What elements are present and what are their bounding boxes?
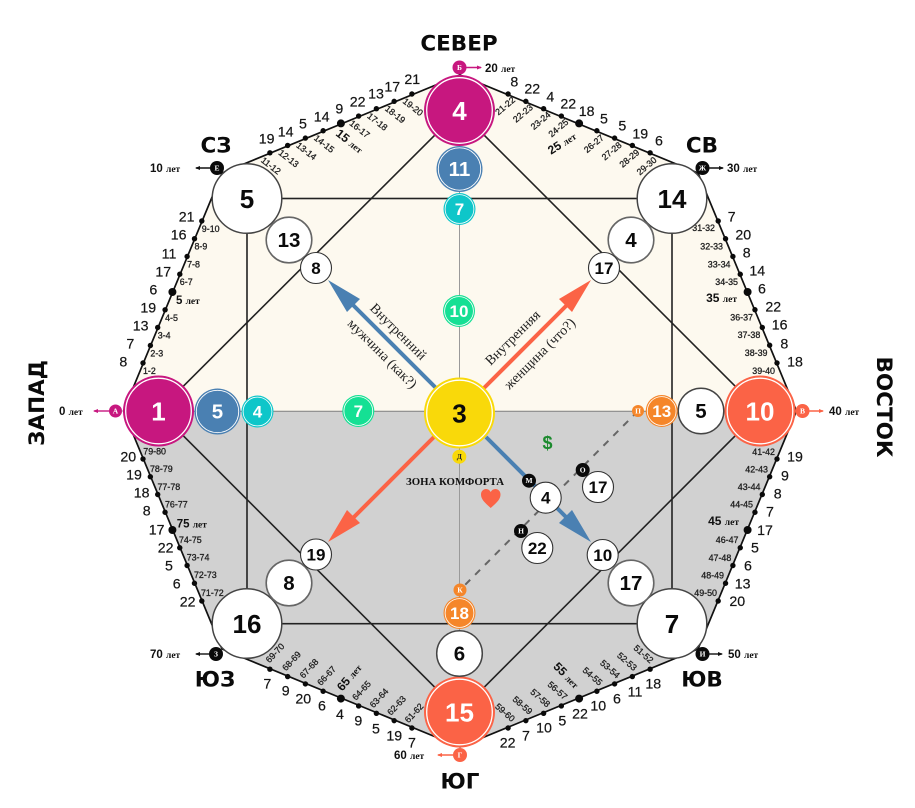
node: 17 with badge О bbox=[576, 463, 614, 502]
edge: north to north-east (ages 20-30): 8 bbox=[510, 75, 518, 91]
node: north-east corner 14: 14 bbox=[658, 184, 687, 214]
edge: south-east to south (ages 50-60): 57-58 bbox=[528, 687, 552, 709]
edge: north-east to east (ages 30-40): 33-34 bbox=[708, 259, 731, 269]
node: orange 18: 18 bbox=[450, 604, 469, 623]
node: orange 13: 13 bbox=[652, 402, 671, 421]
edge: north-east to east (ages 30-40): 20 bbox=[735, 227, 751, 243]
node: teal 7: 7 bbox=[455, 200, 464, 219]
badge: Д: Д bbox=[457, 452, 463, 461]
node: 17 with badge О: 17 bbox=[589, 478, 607, 497]
node: 17 north-east bbox=[588, 252, 620, 284]
edge: north to north-east (ages 20-30): 19 bbox=[632, 126, 648, 142]
edge: south-east to south (ages 50-60): 51-52 bbox=[632, 643, 655, 665]
edge: south-west to west (ages 70-80): 8 bbox=[143, 504, 151, 520]
badge: К: К bbox=[457, 586, 463, 594]
marker: 40 years: В bbox=[800, 406, 805, 416]
node: north corner 4 bbox=[424, 75, 495, 146]
marker: 40 years bbox=[796, 404, 860, 418]
edge: north to north-east (ages 20-30) bbox=[493, 75, 663, 177]
edge: east to south-east (ages 40-50): 44-45 bbox=[730, 500, 753, 510]
edge: north-west to north (ages 10-20): 13-14 bbox=[294, 140, 318, 162]
edge: south-west to west (ages 70-80): 22 bbox=[180, 595, 196, 611]
marker: 10 years: 10 лет bbox=[150, 163, 181, 175]
node: teal 4 bbox=[242, 396, 274, 428]
edge: east to south-east (ages 40-50): 49-50 bbox=[694, 588, 717, 598]
edge: east to south-east (ages 40-50): 9 bbox=[781, 468, 789, 484]
edge: south to south-west (ages 60-70): 64-65 bbox=[350, 679, 373, 702]
edge: east to south-east (ages 40-50): 41-42 bbox=[752, 447, 775, 457]
node: south corner 15 bbox=[424, 676, 495, 748]
edge: north to north-east (ages 20-30): 23-24 bbox=[529, 110, 553, 132]
edge: north to north-east (ages 20-30): 22-23 bbox=[511, 102, 535, 124]
node: 8 south-west bbox=[266, 560, 312, 606]
edge: west to north-west (ages 0-10): 7 bbox=[126, 336, 134, 352]
badge: П: П bbox=[635, 406, 641, 416]
edge: south-west to west (ages 70-80): 17 bbox=[149, 522, 165, 538]
edge: west to north-west (ages 0-10): 2-3 bbox=[150, 348, 163, 358]
node: north-east corner 14 bbox=[637, 164, 707, 233]
node: 13 north-west: 13 bbox=[278, 229, 300, 252]
marker: 10 years: Е bbox=[214, 164, 220, 172]
edge: south to south-west (ages 60-70): 65 лет bbox=[334, 661, 365, 694]
edge: south-east to south (ages 50-60): 10 bbox=[590, 698, 606, 714]
node: 13 north-west bbox=[266, 217, 312, 263]
edge: north to north-east (ages 20-30): 29-30 bbox=[635, 155, 659, 177]
edge: north to north-east (ages 20-30): 27-28 bbox=[600, 140, 624, 162]
heading: south: ЮГ bbox=[441, 770, 480, 794]
edge: south-west to west (ages 70-80): 20 bbox=[120, 450, 136, 466]
heading: east: ВОСТОК bbox=[871, 357, 896, 458]
node: green 10 bbox=[443, 295, 475, 327]
edge: south-west to west (ages 70-80): 19 bbox=[126, 468, 142, 484]
edge: west to north-west (ages 0-10): 4-5 bbox=[165, 313, 178, 323]
marker: 30 years bbox=[696, 161, 758, 175]
marker: 30 years: 30 лет bbox=[727, 163, 758, 175]
node: south corner 15: 15 bbox=[445, 698, 474, 728]
edge: north to north-east (ages 20-30): 22 bbox=[560, 96, 576, 112]
node: blue 5 bbox=[194, 388, 240, 434]
label: inner woman: Внутренняя bbox=[483, 307, 544, 369]
node: green 7: 7 bbox=[354, 402, 363, 421]
node: green 10: 10 bbox=[450, 302, 468, 321]
edge: south to south-west (ages 60-70): 4 bbox=[336, 707, 344, 723]
edge: east to south-east (ages 40-50): 13 bbox=[735, 576, 751, 592]
edge: north to north-east (ages 20-30): 22 bbox=[524, 81, 540, 97]
node: white 6 south: 6 bbox=[454, 642, 465, 666]
edge: south-west to west (ages 70-80): 75 лет bbox=[177, 518, 207, 530]
edge: south-east to south (ages 50-60) bbox=[493, 643, 661, 752]
marker: 70 years: З bbox=[214, 650, 218, 658]
label: inner man: Внутренний bbox=[366, 301, 429, 364]
comfort zone label: ЗОНА КОМФОРТА bbox=[406, 476, 504, 488]
marker: 0 years bbox=[59, 404, 122, 418]
edge: east to south-east (ages 40-50): 7 bbox=[766, 505, 774, 521]
edge: north-west to north (ages 10-20): 22 bbox=[350, 95, 366, 111]
edge: north-east to east (ages 30-40): 39-40 bbox=[752, 366, 775, 376]
edge: north-west to north (ages 10-20): 17-18 bbox=[365, 111, 389, 133]
marker: 0 years: 0 лет bbox=[59, 406, 83, 418]
node: 8 south-west: 8 bbox=[283, 572, 295, 595]
node: center 3 bbox=[424, 378, 495, 448]
marker: 20 years: Б bbox=[457, 63, 462, 72]
node: green 7 bbox=[342, 395, 374, 427]
edge: south-east to south (ages 50-60): 11 bbox=[628, 685, 642, 701]
badge: К bbox=[454, 584, 466, 596]
node: 22 with badge Н bbox=[514, 524, 553, 564]
marker: 10 years bbox=[150, 161, 224, 175]
edge: south-east to south (ages 50-60): 18 bbox=[645, 676, 661, 692]
node: south-east corner 7 bbox=[637, 589, 707, 658]
node: orange 18 bbox=[444, 597, 476, 629]
edge: west to north-west (ages 0-10): 11 bbox=[162, 246, 176, 262]
edge: east to south-east (ages 40-50): 6 bbox=[744, 558, 752, 574]
marker: 50 years: 50 лет bbox=[728, 649, 759, 661]
edge: west to north-west (ages 0-10): 17 bbox=[155, 265, 171, 281]
heading: south-west: ЮЗ bbox=[195, 668, 235, 692]
edge: south-west to west (ages 70-80) bbox=[120, 446, 224, 611]
node: 17 south-east: 17 bbox=[620, 572, 642, 595]
edge: south-east to south (ages 50-60): 10 bbox=[536, 721, 552, 737]
edge: north to north-east (ages 20-30): 24-25 bbox=[546, 117, 570, 139]
edge: north to north-east (ages 20-30): 18 bbox=[579, 104, 595, 120]
edge: north to north-east (ages 20-30): 5 bbox=[600, 111, 608, 127]
edge: north-west to north (ages 10-20): 9 bbox=[335, 101, 343, 117]
edge: south-west to west (ages 70-80): 74-75 bbox=[179, 535, 202, 545]
edge: east to south-east (ages 40-50): 20 bbox=[729, 594, 745, 610]
edge: south-west to west (ages 70-80): 5 bbox=[165, 559, 173, 575]
edge: east to south-east (ages 40-50): 5 bbox=[751, 540, 759, 556]
marker: 20 years: 20 лет bbox=[485, 63, 516, 75]
edge: south-east to south (ages 50-60): 5 bbox=[558, 714, 566, 730]
edge: south-east to south (ages 50-60): 54-55 bbox=[581, 665, 604, 688]
edge: north-west to north (ages 10-20): 15 лет bbox=[333, 126, 366, 156]
edge: north-east to east (ages 30-40): 37-38 bbox=[738, 330, 760, 340]
edge: north to north-east (ages 20-30): 6 bbox=[655, 134, 663, 150]
edge: south-west to west (ages 70-80): 76-77 bbox=[165, 500, 188, 510]
icon: heart bbox=[481, 489, 500, 508]
edge: south-west to west (ages 70-80): 22 bbox=[158, 541, 174, 557]
edge: north-east to east (ages 30-40): 32-33 bbox=[700, 242, 723, 252]
marker: 50 years: И bbox=[700, 650, 706, 658]
edge: south-east to south (ages 50-60): 22 bbox=[572, 706, 588, 722]
label: inner man: мужчина (как?) bbox=[344, 317, 420, 392]
node: white 6 south bbox=[437, 631, 482, 676]
edge: south to south-west (ages 60-70): 68-69 bbox=[280, 649, 303, 673]
arrow: blue lower right bbox=[486, 437, 591, 542]
node: 10 south-east bbox=[587, 540, 618, 570]
node: orange 13 bbox=[646, 395, 678, 427]
marker: 40 years: 40 лет bbox=[829, 406, 860, 418]
node: teal 4: 4 bbox=[253, 402, 263, 422]
edge: west to north-west (ages 0-10): 1-2 bbox=[143, 366, 156, 376]
marker: 30 years: Ж bbox=[699, 164, 707, 172]
arrow: inner man (blue) bbox=[328, 280, 436, 388]
marker: 0 years: А bbox=[113, 406, 119, 416]
edge: north-west to north (ages 10-20): 16-17 bbox=[348, 118, 372, 140]
edge: north-east to east (ages 30-40) bbox=[692, 210, 803, 376]
heading: west: ЗАПАД bbox=[25, 360, 50, 446]
edge: south-east to south (ages 50-60): 7 bbox=[522, 728, 530, 744]
edge: north-east to east (ages 30-40): 22 bbox=[765, 299, 781, 315]
dashed line from point П to point К bbox=[460, 411, 638, 590]
edge: west to north-west (ages 0-10): 6 bbox=[149, 282, 157, 298]
marker: 60 years: Г bbox=[458, 750, 463, 760]
edge: west to north-west (ages 0-10): 19 bbox=[140, 300, 156, 316]
marker: 60 years: 60 лет bbox=[394, 750, 425, 762]
edge: north to north-east (ages 20-30): 25 лет bbox=[545, 129, 579, 157]
edge: south-east to south (ages 50-60): 59-60 bbox=[493, 701, 517, 724]
node: 4 north-east bbox=[608, 217, 654, 263]
edge: east to south-east (ages 40-50): 45 лет bbox=[708, 514, 739, 528]
edge: east to south-east (ages 40-50): 19 bbox=[787, 450, 803, 466]
edge: south-west to west (ages 70-80): 73-74 bbox=[187, 552, 209, 562]
edge: north-west to north (ages 10-20): 17 bbox=[384, 80, 400, 96]
node: white 5 east bbox=[678, 388, 724, 434]
edge: north-east to east (ages 30-40): 8 bbox=[743, 245, 751, 261]
node: 10 south-east: 10 bbox=[593, 546, 612, 565]
node: 22 with badge Н: Н bbox=[518, 526, 524, 536]
node: blue 5: 5 bbox=[212, 400, 223, 424]
edge: north-west to north (ages 10-20): 21 bbox=[404, 72, 420, 88]
edge: west to north-west (ages 0-10): 13 bbox=[133, 319, 149, 335]
node: north corner 4: 4 bbox=[452, 96, 467, 126]
edge: north-east to east (ages 30-40): 35 лет bbox=[706, 291, 737, 305]
edge: south-west to west (ages 70-80): 18 bbox=[134, 485, 150, 501]
edge: south to south-west (ages 60-70): 63-64 bbox=[368, 686, 390, 710]
edge: west to north-west (ages 0-10): 9-10 bbox=[202, 224, 220, 234]
edge: north-east to east (ages 30-40): 36-37 bbox=[730, 312, 753, 322]
edge: west to north-west (ages 0-10): 7-8 bbox=[187, 260, 200, 270]
marker: 70 years: 70 лет bbox=[150, 649, 181, 661]
edge: west to north-west (ages 0-10): 16 bbox=[171, 227, 187, 243]
edge: south to south-west (ages 60-70): 6 bbox=[318, 698, 326, 714]
edge: west to north-west (ages 0-10): 5 лет bbox=[176, 295, 200, 307]
node: west corner 1: 1 bbox=[151, 396, 166, 426]
edge: east to south-east (ages 40-50): 17 bbox=[757, 523, 773, 539]
node: 8 north-west bbox=[300, 252, 332, 284]
edge: south-west to west (ages 70-80): 71-72 bbox=[201, 588, 224, 598]
edge: south-west to west (ages 70-80): 77-78 bbox=[158, 482, 180, 492]
node: 17 with badge О: О bbox=[580, 466, 586, 474]
node: south-west corner 16: 16 bbox=[233, 609, 261, 639]
edge: west to north-west (ages 0-10): 6-7 bbox=[180, 277, 193, 287]
edge: north-west to north (ages 10-20): 14 bbox=[278, 125, 294, 141]
octagon: upper half cream and lower half gray bbox=[124, 75, 796, 747]
edge: west to north-west (ages 0-10) bbox=[119, 210, 220, 376]
node: 22 with badge Н: 22 bbox=[528, 539, 547, 558]
node: 4 with badge М: 4 bbox=[541, 489, 551, 508]
node: 4 with badge М: М bbox=[525, 476, 533, 485]
edge: south-west to west (ages 70-80): 78-79 bbox=[150, 464, 173, 474]
marker: 50 years bbox=[696, 647, 759, 661]
marker: 60 years bbox=[394, 748, 467, 762]
marker: 70 years bbox=[150, 647, 223, 661]
arrow: coral lower left bbox=[328, 437, 434, 542]
edge: south to south-west (ages 60-70): 9 bbox=[354, 714, 362, 730]
edge: north-west to north (ages 10-20): 5 bbox=[299, 117, 307, 133]
edge: south to south-west (ages 60-70): 62-63 bbox=[385, 694, 408, 717]
edge: north to north-east (ages 20-30): 5 bbox=[618, 118, 626, 134]
edge: south to south-west (ages 60-70): 19 bbox=[386, 728, 402, 744]
node: south-east corner 7: 7 bbox=[665, 609, 679, 639]
edge: east to south-east (ages 40-50): 42-43 bbox=[745, 464, 768, 474]
edge: north-west to north (ages 10-20): 19-20 bbox=[401, 96, 425, 118]
edge: south-west to west (ages 70-80): 72-73 bbox=[194, 570, 217, 580]
edge: south-east to south (ages 50-60): 6 bbox=[613, 691, 621, 707]
node: west corner 1 bbox=[123, 376, 194, 446]
edge: south-west to west (ages 70-80): 6 bbox=[173, 576, 181, 592]
node: 17 north-east: 17 bbox=[595, 259, 613, 278]
edge: west to north-west (ages 0-10): 21 bbox=[179, 210, 195, 226]
arrow: inner woman (coral) bbox=[484, 280, 591, 388]
badge: П bbox=[632, 405, 644, 417]
edge: north-east to east (ages 30-40): 14 bbox=[749, 263, 765, 279]
edge: south to south-west (ages 60-70): 7 bbox=[263, 676, 271, 692]
edge: north-east to east (ages 30-40): 16 bbox=[772, 317, 788, 333]
node: north-west corner 5 bbox=[212, 164, 282, 233]
edge: south to south-west (ages 60-70): 66-67 bbox=[315, 664, 338, 688]
edge: south to south-west (ages 60-70): 7 bbox=[408, 736, 416, 752]
node: north-west corner 5: 5 bbox=[240, 184, 254, 214]
edge: east to south-east (ages 40-50) bbox=[694, 447, 803, 610]
edge: west to north-west (ages 0-10): 3-4 bbox=[158, 330, 171, 340]
edge: east to south-east (ages 40-50): 47-48 bbox=[709, 553, 731, 563]
node: 4 with badge М bbox=[522, 474, 561, 513]
edge: south-east to south (ages 50-60): 55 лет bbox=[551, 659, 583, 691]
label: inner woman: женщина (что?) bbox=[501, 316, 579, 394]
edge: north-west to north (ages 10-20): 13 bbox=[368, 87, 384, 103]
node: 17 south-east bbox=[608, 560, 654, 606]
edge: south to south-west (ages 60-70): 61-62 bbox=[403, 701, 425, 725]
icon: dollar sign: $ bbox=[542, 433, 553, 453]
edge: west to north-west (ages 0-10): 8 bbox=[119, 355, 127, 371]
edge: north-west to north (ages 10-20): 14 bbox=[314, 110, 330, 126]
node: blue 11 bbox=[436, 146, 482, 192]
edge: south-east to south (ages 50-60): 53-54 bbox=[598, 658, 622, 680]
edge: south to south-west (ages 60-70): 69-70 bbox=[264, 641, 286, 665]
edge: south to south-west (ages 60-70) bbox=[263, 641, 425, 752]
edge: north to north-east (ages 20-30): 28-29 bbox=[617, 147, 641, 170]
edge: north-east to east (ages 30-40): 38-39 bbox=[745, 348, 768, 358]
edge: south to south-west (ages 60-70): 67-68 bbox=[298, 657, 320, 680]
edge: north-east to east (ages 30-40): 7 bbox=[728, 210, 736, 226]
edge: north-west to north (ages 10-20): 11-12 bbox=[259, 155, 283, 177]
edge: north-west to north (ages 10-20): 18-19 bbox=[383, 103, 407, 125]
edge: east to south-east (ages 40-50): 8 bbox=[774, 487, 782, 503]
edge: south-east to south (ages 50-60): 52-53 bbox=[615, 650, 639, 673]
edge: north to north-east (ages 20-30): 26-27 bbox=[582, 133, 606, 155]
edge: north-east to east (ages 30-40): 34-35 bbox=[715, 277, 738, 287]
heading: north: СЕВЕР bbox=[420, 32, 498, 56]
node: 4 north-east: 4 bbox=[625, 229, 637, 252]
node: teal 7 bbox=[444, 193, 476, 225]
edge: south to south-west (ages 60-70): 9 bbox=[282, 683, 290, 699]
node: east corner 10 bbox=[724, 376, 796, 446]
edge: south-east to south (ages 50-60): 56-57 bbox=[546, 679, 569, 702]
edge: north-east to east (ages 30-40): 31-32 bbox=[692, 223, 715, 233]
badge: Д bbox=[452, 450, 466, 464]
heading: north-west: СЗ bbox=[200, 134, 232, 158]
node: 19 south-west bbox=[300, 539, 332, 570]
edge: south to south-west (ages 60-70): 5 bbox=[372, 721, 380, 737]
edge: north to north-east (ages 20-30): 4 bbox=[546, 90, 554, 106]
edge: south-east to south (ages 50-60): 58-59 bbox=[511, 694, 534, 717]
node: east corner 10: 10 bbox=[746, 396, 774, 426]
heading: north-east: СВ bbox=[686, 134, 718, 158]
edge: north-east to east (ages 30-40): 8 bbox=[780, 336, 788, 352]
edge: south-east to south (ages 50-60): 22 bbox=[500, 736, 516, 752]
node: 19 south-west: 19 bbox=[307, 546, 325, 564]
edge: east to south-east (ages 40-50): 48-49 bbox=[701, 570, 724, 580]
node: white 5 east: 5 bbox=[695, 400, 707, 423]
edge: north-east to east (ages 30-40): 18 bbox=[787, 355, 803, 371]
node: blue 11: 11 bbox=[449, 158, 470, 181]
edge: north-west to north (ages 10-20): 19 bbox=[259, 131, 275, 147]
edge: north-west to north (ages 10-20) bbox=[259, 72, 425, 177]
inner square and diamond lines bbox=[158, 110, 760, 712]
edge: east to south-east (ages 40-50): 43-44 bbox=[738, 482, 761, 492]
edge: north-east to east (ages 30-40): 6 bbox=[758, 281, 766, 297]
edge: west to north-west (ages 0-10): 8-9 bbox=[194, 242, 207, 252]
node: 8 north-west: 8 bbox=[311, 259, 321, 278]
node: south-west corner 16 bbox=[212, 589, 282, 658]
edge: south-west to west (ages 70-80): 79-80 bbox=[143, 446, 166, 456]
marker: 20 years bbox=[452, 60, 516, 75]
edge: north-west to north (ages 10-20): 14-15 bbox=[312, 133, 336, 155]
heading: south-east: ЮВ bbox=[681, 668, 723, 692]
edge: east to south-east (ages 40-50): 46-47 bbox=[716, 535, 739, 545]
node: center 3: 3 bbox=[452, 398, 467, 428]
edge: south to south-west (ages 60-70): 20 bbox=[295, 692, 311, 708]
edge: north to north-east (ages 20-30): 21-22 bbox=[493, 95, 517, 117]
edge: north-west to north (ages 10-20): 12-13 bbox=[277, 148, 301, 169]
